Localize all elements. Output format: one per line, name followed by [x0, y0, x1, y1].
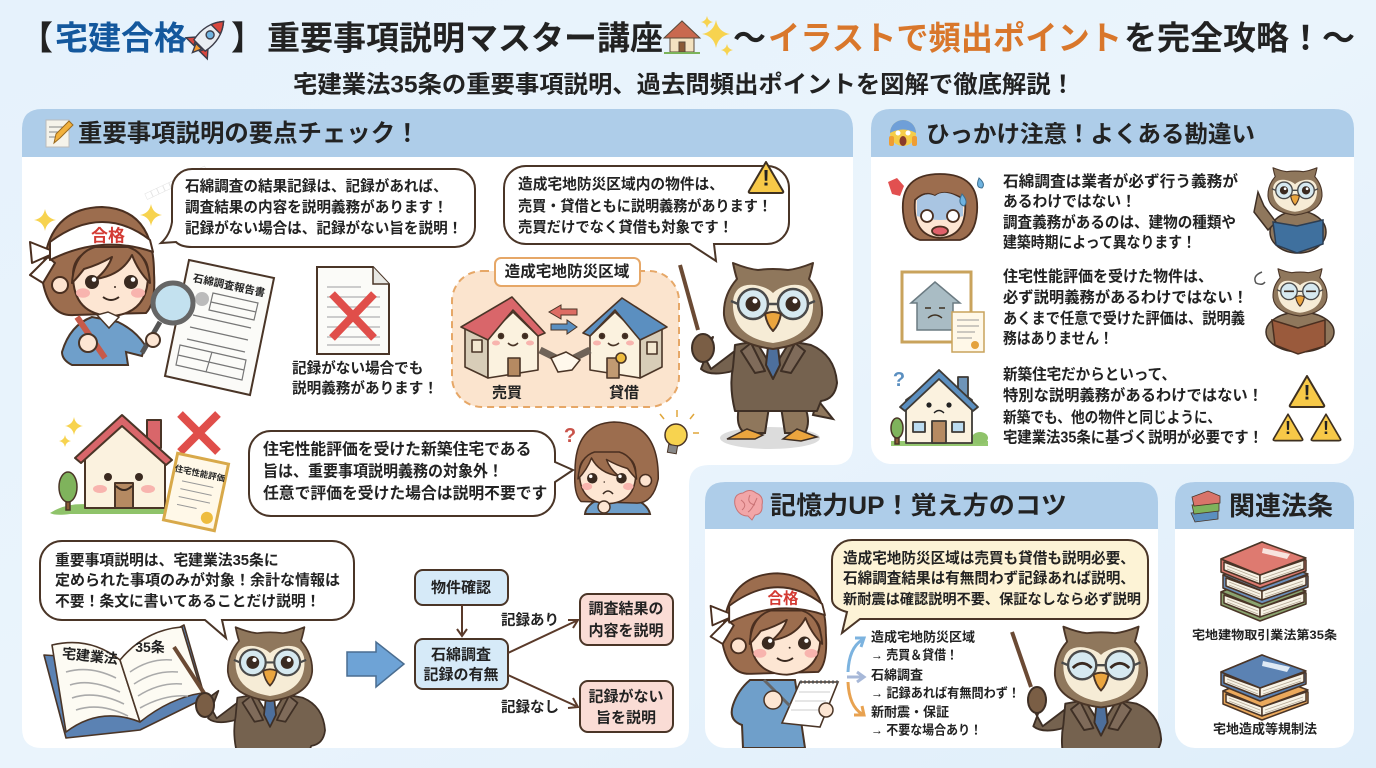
icon: warning: !: [762, 166, 770, 190]
bubble: disaster zone: 造成宅地防災区域内の物件は、: [518, 175, 724, 193]
text: new build: 宅建業法35条に基づく説明が必要です！: [1003, 428, 1263, 446]
diagram: disaster zone houses: [452, 258, 679, 407]
panel: memory tips: [705, 482, 1161, 766]
bubble: disaster zone: 売買・貸借ともに説明義務があります！: [518, 197, 772, 215]
open law book: [44, 625, 205, 738]
text: performance evaluation: あくまで任意で受けた評価は、説明義: [1003, 310, 1245, 328]
diagram: disaster zone houses: 売買: [492, 384, 522, 402]
heading: ひっかけ注意！よくある勘違い: [926, 121, 1255, 147]
icon: memo pencil: [46, 120, 73, 147]
house: lease: [583, 298, 667, 378]
text: asbestos: 調査義務があるのは、建物の種類や: [1003, 214, 1236, 232]
text: new build: 特別な説明義務があるわけではない！: [1003, 386, 1263, 404]
caption: no record: [292, 359, 438, 397]
girl with magnifier: 合格: [91, 226, 125, 246]
icon: rocket: [182, 11, 234, 63]
diagram: disaster zone houses: 貸借: [609, 384, 639, 402]
text: new build: 新築でも、他の物件と同じように、: [1003, 408, 1221, 426]
text: tips list: → 不要な場合あり！: [871, 722, 982, 738]
bubble: disaster zone: 売買だけでなく貸借も対象です！: [518, 218, 733, 236]
bubble: performance evaluation: 住宅性能評価を受けた新築住宅である: [263, 440, 531, 458]
owl teacher with pointer: [680, 263, 837, 449]
icon: handshake: [540, 350, 590, 372]
icon: brain: [735, 490, 762, 520]
document: asbestos report: [165, 260, 274, 395]
bubble: mnemonic: 造成宅地防災区域は売買も貸借も説明必要、: [843, 549, 1135, 567]
icons: warnings: !: [1304, 382, 1310, 404]
panel: related laws: [1175, 482, 1354, 748]
flowchart: 記録なし: [501, 699, 559, 716]
flowchart: 石綿調査: [431, 646, 491, 664]
owl smiling with pointer: [1012, 627, 1161, 766]
title: 宅建合格: [55, 20, 187, 56]
title: イラストで頻出ポイント: [768, 20, 1122, 56]
book stack 1: [1221, 542, 1308, 621]
girl with magnifier: [30, 204, 193, 365]
girl with notepad: 合格: [767, 588, 799, 608]
arrows: exchange: [549, 305, 577, 319]
bubble: record check: 石綿調査の結果記録は、記録があれば、: [185, 177, 448, 195]
flowchart: 内容を説明: [588, 622, 664, 640]
icon: sad house in frame: [902, 272, 984, 352]
bubble: record check: [161, 169, 475, 247]
bubble: record check: 調査結果の内容を説明義務があります！: [185, 198, 448, 216]
icons: warnings: [1273, 376, 1341, 441]
caption: law 2: 宅地造成等規制法: [1213, 722, 1317, 736]
text: tips list: 新耐震・保証: [871, 704, 949, 720]
bubble: performance evaluation: [249, 431, 573, 516]
title: 】: [231, 20, 264, 56]
girl thinking: ?: [564, 425, 576, 447]
title: 【: [20, 20, 53, 56]
icon: worried house: [891, 369, 988, 446]
open law book: 35条: [135, 639, 165, 655]
big arrow: [347, 642, 404, 687]
subtitle: 宅建業法35条の重要事項説明、過去問頻出ポイントを図解で徹底解説！: [293, 72, 1075, 98]
title: 〜: [733, 20, 766, 56]
text: performance evaluation: 務はありません！: [1003, 330, 1113, 348]
bubble: article 35: 定められた事項のみが対象！余計な情報は: [55, 571, 340, 589]
icon: books: [1191, 491, 1220, 522]
text: performance evaluation: [1003, 268, 1248, 348]
bubble: performance evaluation: 任意で評価を受けた場合は説明不要です: [263, 484, 547, 502]
caption: no record: 説明義務があります！: [292, 379, 438, 397]
text: new build: 新築住宅だからといって、: [1003, 366, 1176, 384]
bubble: mnemonic: 石綿調査結果は有無問わず記録あれば説明、: [843, 569, 1135, 587]
bubble: mnemonic: [832, 540, 1148, 633]
text: asbestos: あるわけではない！: [1003, 194, 1136, 210]
flowchart: 記録がない: [588, 688, 664, 706]
house with certificate and cross: [50, 414, 229, 531]
text: tips list: → 記録あれば有無問わず！: [871, 686, 1020, 700]
icon: light bulb: [660, 410, 699, 454]
house: sale: [461, 297, 545, 378]
icon: scream emoji: [889, 120, 917, 146]
text: new build: [1003, 366, 1263, 446]
title: [20, 11, 1355, 63]
flowchart: [415, 570, 673, 732]
flowchart: 記録あり: [501, 612, 559, 629]
text: performance evaluation: 住宅性能評価を受けた物件は、: [1003, 268, 1213, 286]
icon: warning: [749, 162, 783, 193]
text: tips list: → 売買＆貸借！: [871, 648, 958, 662]
girl thinking: [564, 410, 699, 514]
bubble: article 35: [40, 541, 354, 638]
icons: warnings: !: [1285, 418, 1291, 438]
title: を完全攻略！〜: [1124, 20, 1355, 56]
text: tips list: 造成宅地防災区域: [871, 630, 975, 644]
bubble: record check: 記録がない場合は、記録がない旨を説明！: [185, 219, 462, 237]
bubble: article 35: 重要事項説明は、宅建業法35条に: [55, 551, 279, 569]
icon: house emoji: [664, 21, 700, 53]
watermark: □□□□□□□□□□: [143, 163, 209, 202]
icon: crossed document: [317, 267, 389, 354]
flowchart: 物件確認: [431, 578, 491, 596]
caption: no record: 記録がない場合でも: [292, 359, 423, 377]
heading: 記憶力UP！覚え方のコツ: [770, 492, 1067, 520]
text: asbestos: [1003, 172, 1238, 252]
flowchart: 記録の有無: [423, 666, 499, 684]
document: asbestos report: 石綿調査報告書: [192, 272, 266, 300]
heading: 重要事項説明の要点チェック！: [78, 120, 419, 148]
owl teacher with book: [174, 627, 325, 754]
text: asbestos: 建築時期によって異なります！: [1003, 234, 1196, 252]
bubble: disaster zone: [504, 162, 789, 261]
owl with brown book: [1255, 269, 1334, 354]
panel: common mistakes: [871, 109, 1354, 464]
flowchart: 調査結果の: [588, 600, 664, 618]
text: tips list: 石綿調査: [871, 668, 923, 682]
open law book: 宅建業法: [61, 645, 119, 667]
girl with notepad: [711, 573, 838, 748]
bubble: performance evaluation: 旨は、重要事項説明義務の対象外！: [263, 462, 503, 480]
caption: law 1: 宅地建物取引業法第35条: [1192, 627, 1337, 642]
book stack 2: [1221, 655, 1308, 720]
house with certificate and cross: 住宅性能評価: [174, 463, 226, 484]
text: asbestos: 石綿調査は業者が必ず行う義務が: [1003, 172, 1238, 190]
icon: scared girl: [888, 174, 983, 240]
icon: sparkles: [701, 16, 733, 56]
icons: warnings: !: [1323, 418, 1329, 438]
bubble: mnemonic: 新耐震は確認説明不要、保証なしなら必ず説明: [843, 591, 1141, 608]
arrows: tips: [847, 638, 864, 715]
diagram: disaster zone houses: 造成宅地防災区域: [505, 262, 630, 280]
heading: 関連法条: [1229, 491, 1333, 521]
flowchart: 旨を説明: [596, 708, 656, 726]
owl with blue book: [1254, 168, 1326, 253]
title: 重要事項説明マスター講座: [267, 20, 663, 56]
text: tips list: [871, 630, 1020, 738]
icon: worried house: ?: [893, 369, 905, 391]
bubble: article 35: 不要！条文に書いてあることだけ説明！: [55, 592, 320, 610]
panel: key points: [22, 109, 853, 754]
text: performance evaluation: 必ず説明義務があるわけではない！: [1003, 288, 1248, 306]
